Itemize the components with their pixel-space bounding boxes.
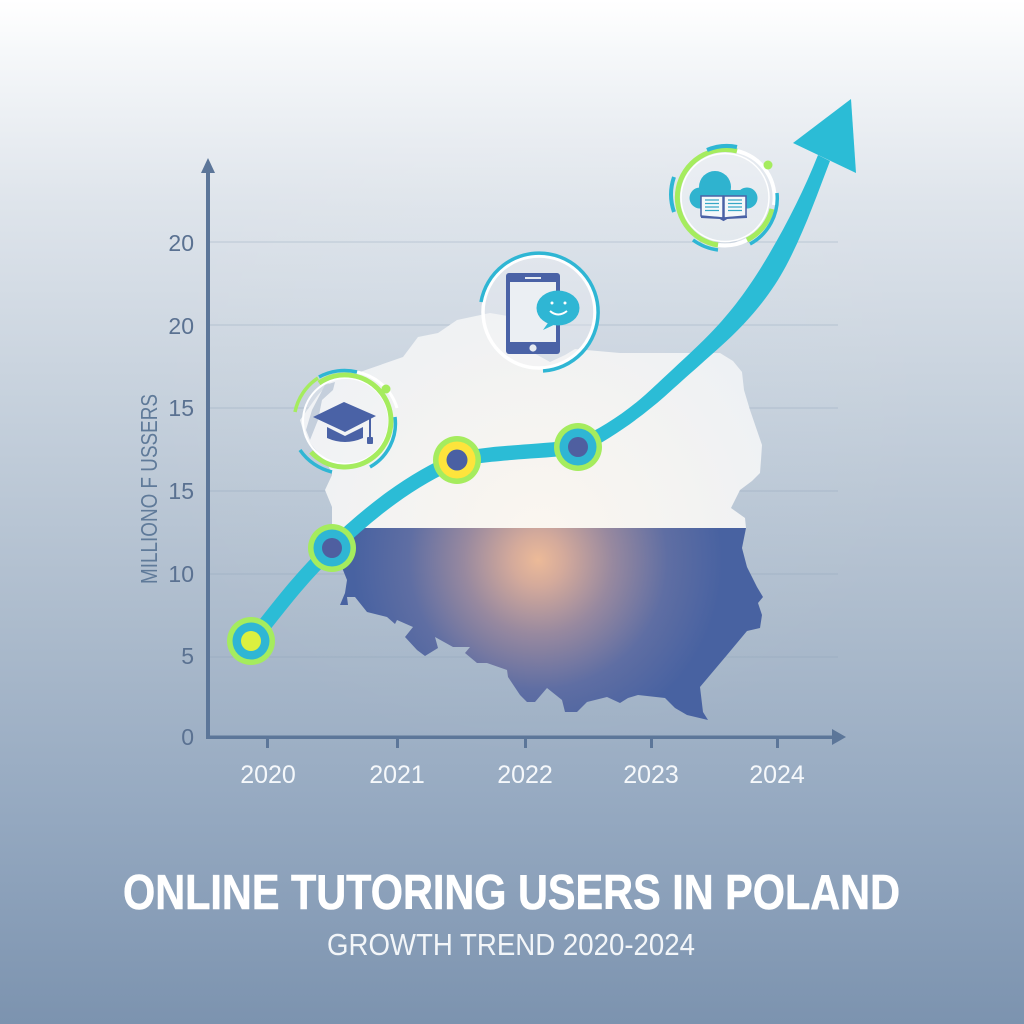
y axis labels: 20 — [168, 313, 194, 339]
map of Poland in flag colours — [300, 313, 763, 720]
x axis year labels: 2021 — [369, 761, 425, 789]
y axis labels: 20 — [168, 230, 194, 256]
map: white upper half — [300, 313, 762, 528]
data point 2022 — [433, 436, 481, 484]
map: blue lower half with glow — [340, 528, 763, 720]
icon: graduation cap badge — [295, 370, 397, 472]
y axis labels: 5 — [181, 643, 194, 669]
y axis with arrow — [201, 158, 215, 739]
y axis labels — [168, 230, 194, 750]
data point 2021 — [308, 524, 356, 572]
y axis labels: 15 — [168, 395, 194, 421]
arrow head — [793, 99, 856, 173]
x axis year labels: 2023 — [623, 761, 679, 789]
data point 2023 — [554, 423, 602, 471]
icon: smartphone chat badge — [481, 253, 598, 371]
y axis labels: 15 — [168, 478, 194, 504]
y axis labels: 0 — [181, 724, 194, 750]
data point 2020 — [227, 617, 275, 665]
trend line: rising section — [575, 155, 830, 454]
x axis year labels — [240, 761, 805, 789]
chart grid lines — [208, 242, 838, 657]
growth trend line with arrow — [252, 99, 856, 641]
x axis with arrow and ticks — [206, 729, 846, 748]
subtitle: GROWTH TREND 2020-2024 — [327, 927, 695, 962]
y axis title: MILLIONO F USSERS — [136, 394, 162, 584]
x axis year labels: 2020 — [240, 761, 296, 789]
trend line: lower section — [252, 447, 578, 641]
y axis labels: 10 — [168, 561, 194, 587]
x axis year labels: 2024 — [749, 761, 805, 789]
title: ONLINE TUTORING USERS IN POLAND — [123, 866, 900, 920]
icon: cloud and book badge — [671, 146, 777, 250]
x axis year labels: 2022 — [497, 761, 553, 789]
